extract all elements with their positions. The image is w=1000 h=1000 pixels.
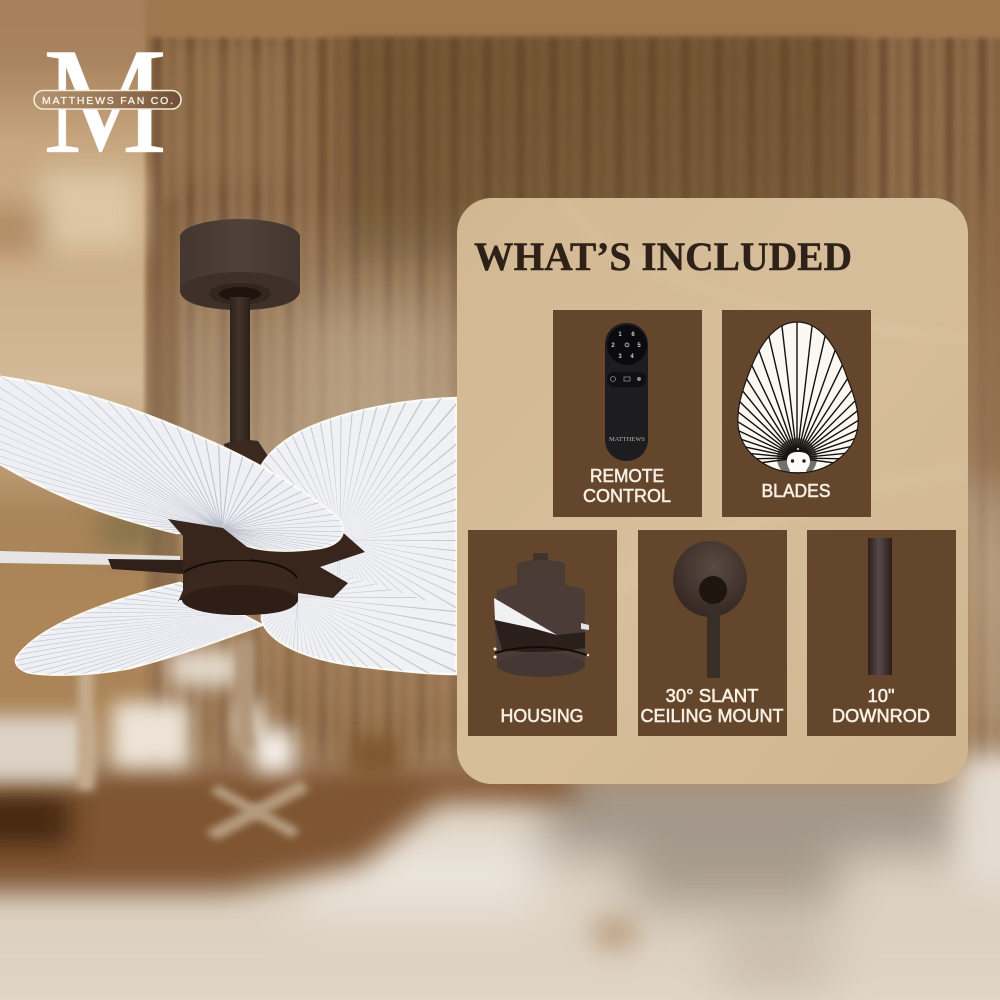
icon: remote <box>605 323 648 461</box>
ceiling fan illustration <box>0 219 456 697</box>
heading: WHAT’S INCLUDED <box>474 234 852 279</box>
far left blade <box>0 551 180 566</box>
logo: Matthews Fan Co.: M <box>43 17 167 185</box>
upper left blade <box>0 376 344 552</box>
card: 30° slant ceiling mount <box>638 530 787 736</box>
card: remote control: CONTROL <box>583 486 671 506</box>
lower left blade <box>14 582 264 676</box>
icon: remote: MATTHEWS <box>609 436 645 443</box>
ceiling band <box>328 9 872 38</box>
blurred furniture <box>0 640 400 845</box>
icon: remote: 5 <box>637 343 641 349</box>
card: housing <box>468 530 617 736</box>
label: 10" <box>868 686 894 706</box>
downrod <box>230 297 250 447</box>
label: 30° SLANT <box>666 686 758 706</box>
right blades <box>260 396 457 676</box>
card: 10 inch downrod: DOWNROD <box>832 706 930 726</box>
canopy <box>180 219 300 310</box>
icon: remote: 6 <box>631 332 635 338</box>
icon: slant mount <box>673 541 747 678</box>
card: 30° slant ceiling mount: CEILING MOUNT <box>640 706 784 726</box>
icon: remote: 2 <box>611 343 615 349</box>
label: HOUSING <box>500 706 584 726</box>
card: blades <box>722 310 871 517</box>
blade arm tip <box>168 519 250 560</box>
left wall column <box>0 0 145 790</box>
icon: remote: 4 <box>630 354 634 360</box>
card: 10 inch downrod <box>807 530 956 736</box>
card: remote control <box>553 310 702 517</box>
icon: remote: ⏻ <box>625 342 630 349</box>
label: REMOTE <box>590 466 664 486</box>
panel: what's included <box>457 198 968 784</box>
icon: remote: 1 <box>618 332 622 338</box>
icon: remote: 3 <box>618 354 622 360</box>
icon: downrod <box>868 538 892 675</box>
slatted wood wall <box>146 20 1000 767</box>
label: BLADES <box>762 481 830 501</box>
motor collar <box>224 440 268 465</box>
icon: motor housing <box>494 553 589 677</box>
motor housing and blade arms <box>108 530 365 615</box>
floor <box>0 755 1000 1000</box>
icon: palm blade <box>737 321 859 474</box>
logo: Matthews Fan Co.: MATTHEWS FAN CO. <box>42 95 173 107</box>
